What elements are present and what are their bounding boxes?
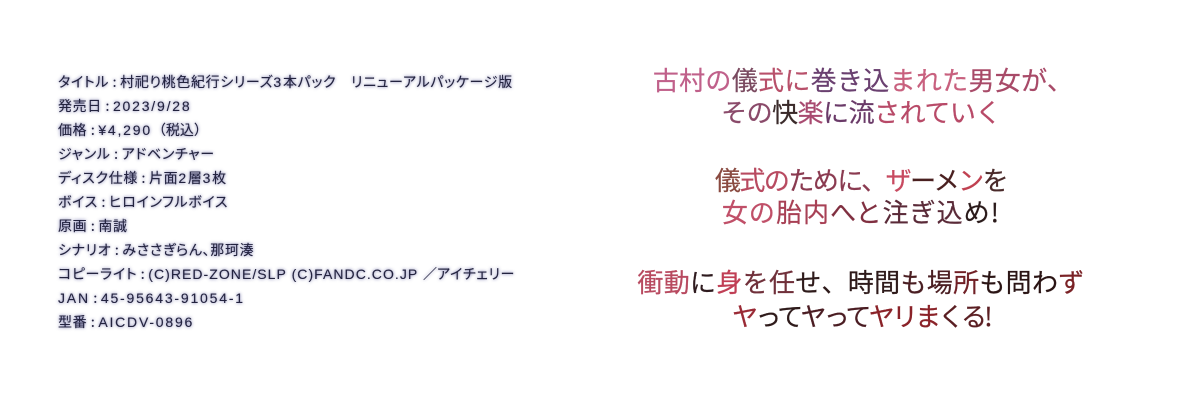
spec: scenario: : (115, 240, 119, 260)
copy line 4: 女の胎内へと注ぎ込め! (722, 193, 1000, 230)
copy line 5: 衝動に身を任せ、時間も場所も問わず (637, 263, 1085, 300)
spec: price: 価格 ¥4,290（税込） (58, 120, 208, 140)
copy line 2: その快楽に流されていく (721, 93, 1001, 130)
spec: release date: 発売日 2023/9/28 (58, 96, 191, 116)
spec: artist: : (91, 216, 95, 236)
spec: voice: ボイス ヒロインフルボイス (58, 192, 228, 212)
product specification list (56, 72, 515, 332)
promotional copy (637, 61, 1085, 334)
spec: scenario: シナリオ みささぎらん、那珂湊 (58, 240, 254, 260)
spec: title: タイトル 村祀り桃色紀行シリーズ3本パック リニューアルパッケージ版 (58, 72, 513, 92)
spec: model number: 型番 AICDV-0896 (58, 312, 194, 332)
spec: artist: 原画 南誠 (58, 216, 128, 236)
spec: title: : (113, 72, 117, 92)
spec: disc format: ディスク仕様 片面2層3枚 (58, 168, 227, 188)
spec: JAN code: JAN 45-95643-91054-1 (58, 290, 245, 306)
spec: copyright: コピーライト (C)RED-ZONE/SLP (C)FANDC.CO.JP ／アイチェリー (58, 264, 515, 284)
copy line 1: 古村の儀式に巻き込まれた男女が、 (653, 61, 1073, 98)
spec: model number: : (91, 312, 95, 332)
spec: genre: ジャンル アドベンチャー (58, 144, 215, 164)
copy line 6: ヤってヤってヤリまくる! (732, 297, 990, 334)
spec: copyright: : (141, 264, 145, 284)
spec: genre: : (114, 144, 118, 164)
spec: disc format: : (142, 168, 145, 188)
spec: voice: : (102, 192, 105, 212)
spec: price: : (91, 120, 95, 140)
copy line 3: 儀式のために、ザーメンを (715, 161, 1007, 198)
spec: release date: : (106, 96, 109, 116)
spec: JAN code: : (93, 288, 97, 308)
